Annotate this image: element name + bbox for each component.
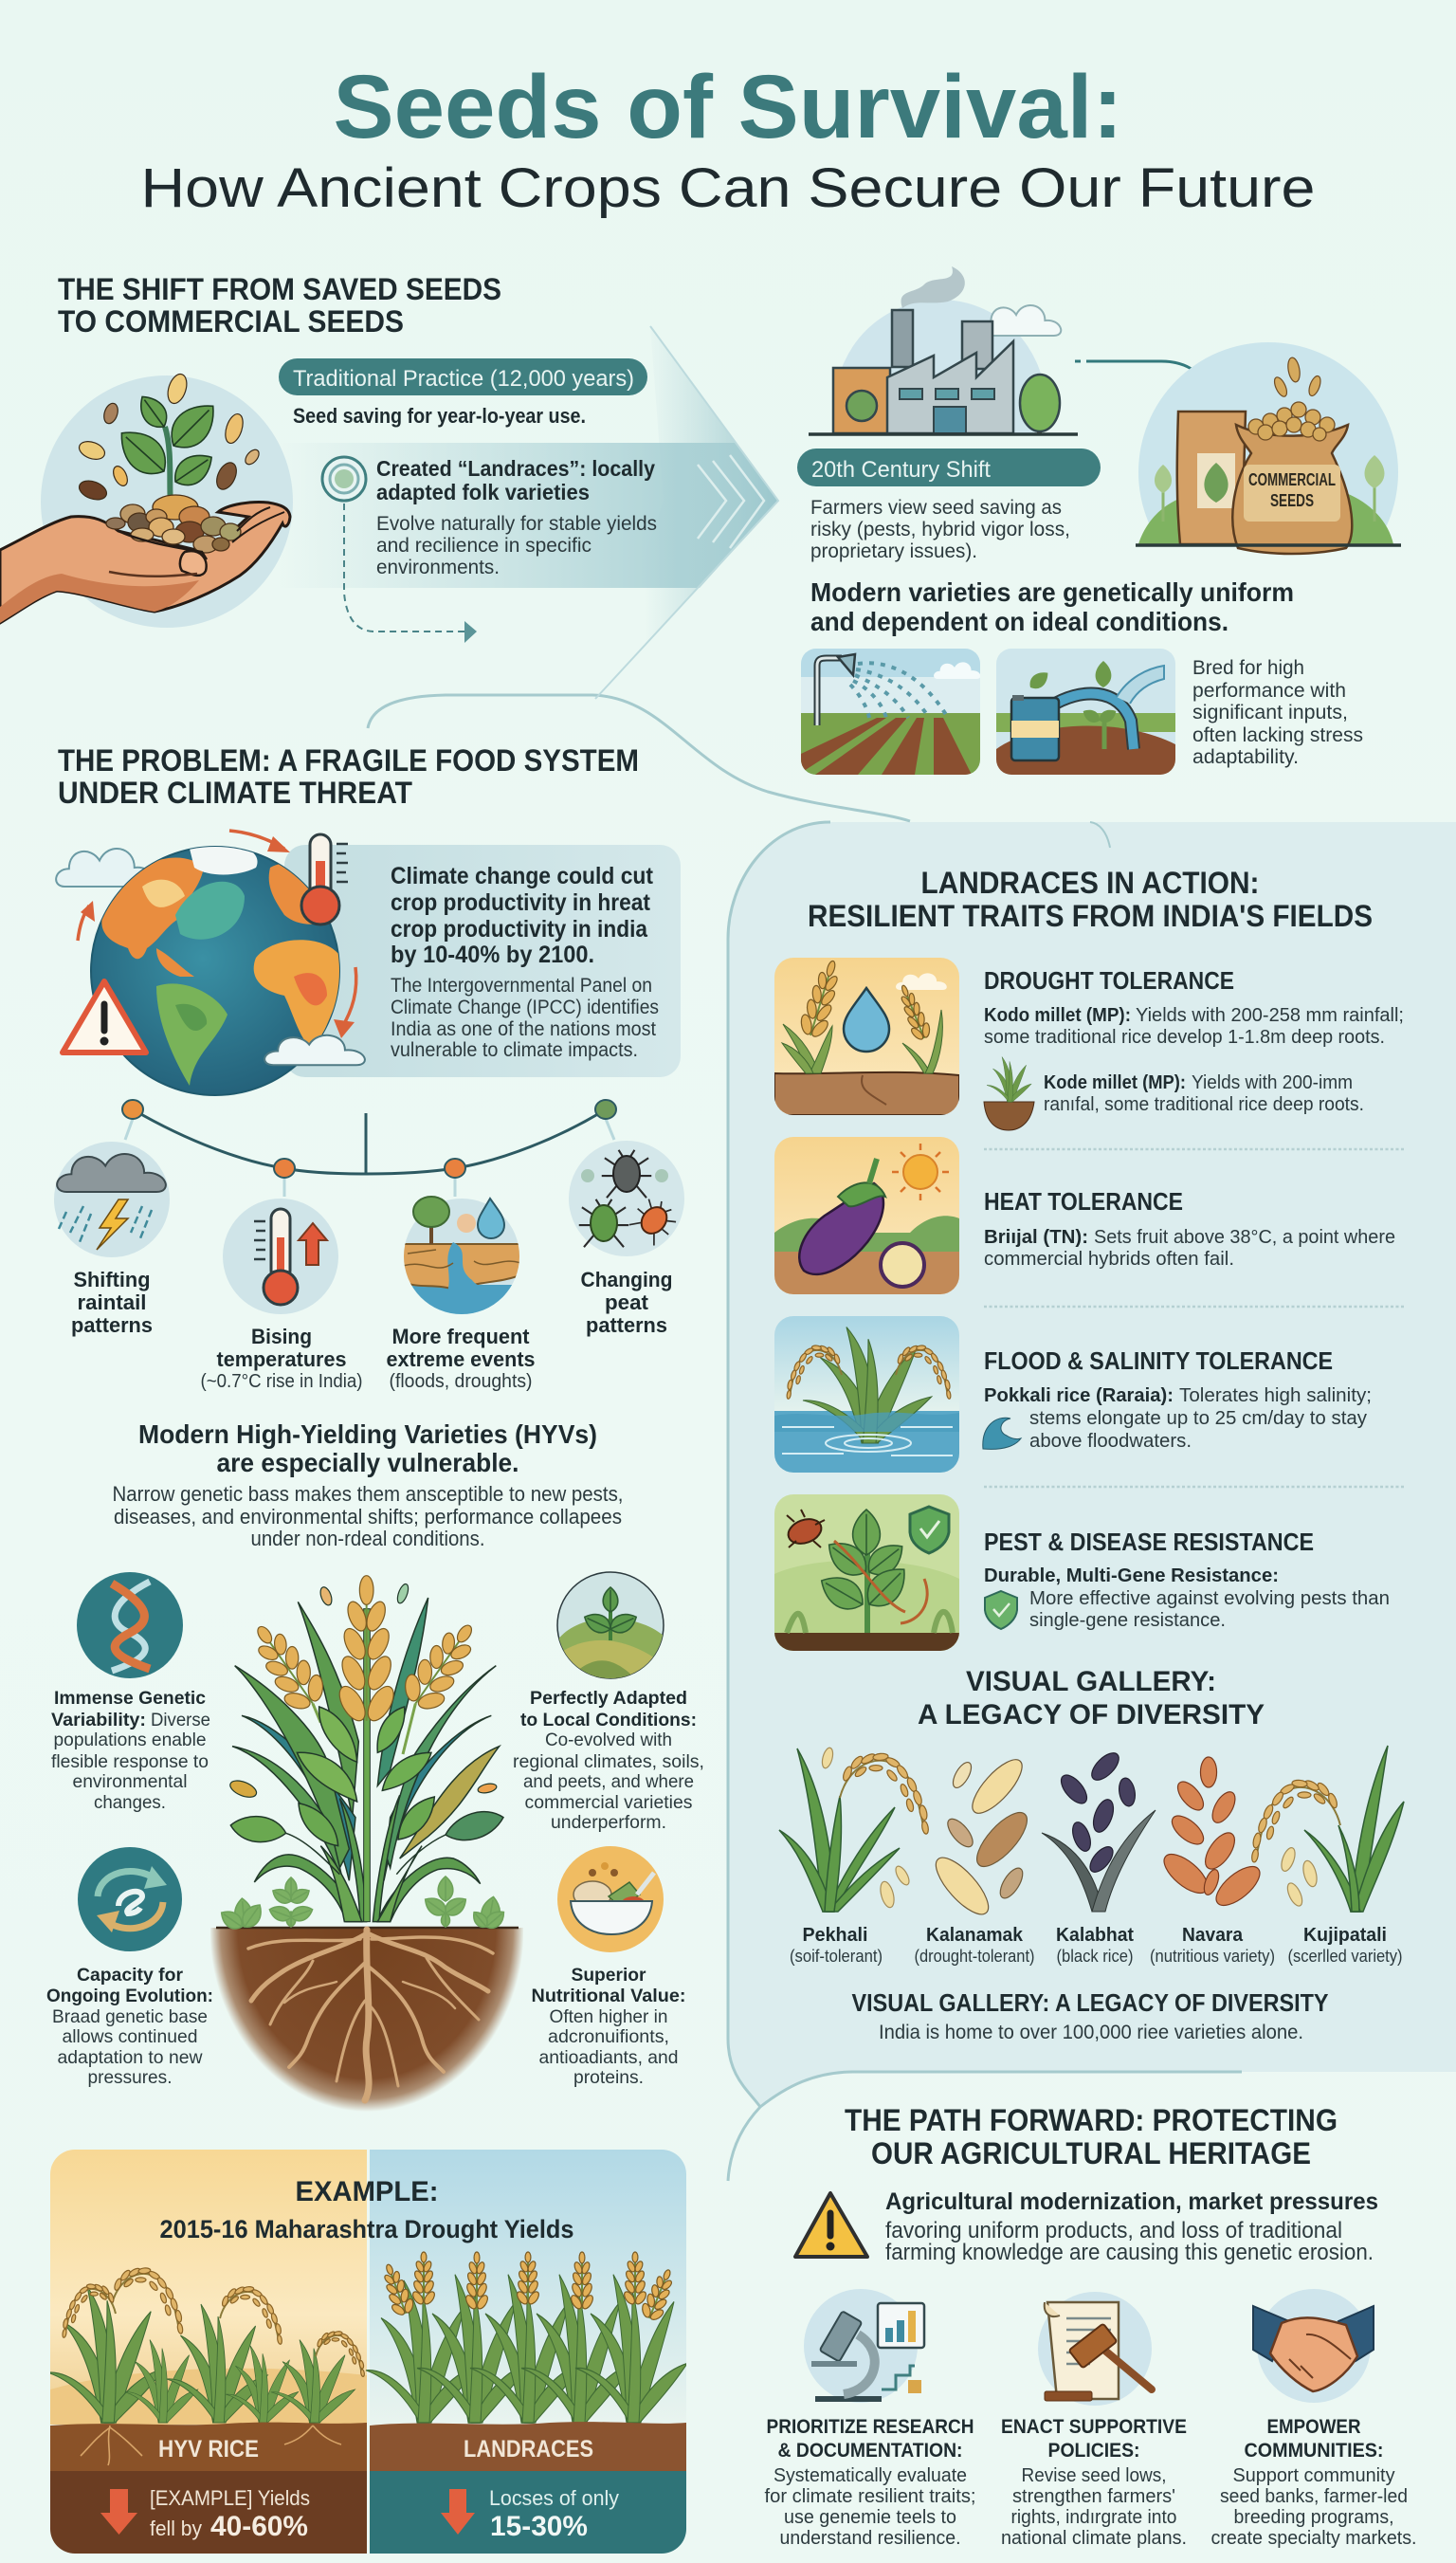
text: HYVs vulnerable: Modern High-Yielding Varieties (HYVs) <box>138 1419 597 1449</box>
text: superior nutrition: proteins. <box>573 2067 644 2088</box>
card: pest illustration <box>774 1494 959 1651</box>
text: modern varieties <box>810 577 1294 636</box>
text: extreme events: More frequent <box>392 1325 530 1348</box>
icon: microscope and chart <box>804 2289 924 2403</box>
text: changing pest patterns: peat <box>605 1291 649 1314</box>
text: empower communities: seed banks, farmer-led <box>1220 2486 1408 2507</box>
text: climate statistic: Climate change could cut <box>391 863 654 889</box>
text: rising temperatures: Bising <box>251 1325 312 1348</box>
text: example heading: 2015-16 Maharashtra Drought Yields <box>159 2215 574 2243</box>
text: landraces description: environments. <box>376 557 500 578</box>
text: bred for high performance: adaptability. <box>1192 746 1299 768</box>
text: bred for high performance: Bred for high <box>1192 657 1304 679</box>
label: HYV rice yields: [EXAMPLE] Yields <box>150 2486 310 2510</box>
text: landraces description <box>376 456 657 578</box>
text: ongoing evolution: adaptation to new <box>57 2047 203 2068</box>
title: How Ancient Crops Can Secure Our Future <box>140 157 1316 219</box>
text: HYVs vulnerable <box>112 1419 624 1550</box>
text: bred for high performance: performance with <box>1192 680 1346 702</box>
text: climate statistic: by 10-40% by 2100. <box>391 942 594 968</box>
icon: globe with thermometer <box>56 831 365 1095</box>
icon: pests <box>569 1141 684 1256</box>
text: drought tolerance: Kode millet (MP): <box>1044 1071 1186 1093</box>
text: gallery labels <box>790 1925 1403 1966</box>
text: flood and salinity: stems elongate up to 25 cm/day to stay <box>1029 1407 1368 1429</box>
label: HYV rice yields: HYV RICE <box>158 2436 259 2462</box>
text: extreme events <box>387 1325 535 1392</box>
text: gallery caption <box>851 1988 1329 2043</box>
label: landraces yields <box>441 2436 619 2542</box>
text: ongoing evolution: Braad genetic base <box>52 2006 208 2027</box>
text: climate statistic <box>391 863 659 1061</box>
heading: the shift <box>58 272 501 339</box>
text: ongoing evolution: Capacity for <box>77 1965 183 1986</box>
heading: the path forward <box>845 2103 1338 2170</box>
text: gallery labels: Kalabhat <box>1056 1925 1134 1946</box>
heading: the shift: TO COMMERCIAL SEEDS <box>58 304 404 339</box>
icon: factory <box>809 266 1078 436</box>
thumbnail: fertilizer <box>996 649 1175 775</box>
text: farmers view: risky (pests, hybrid vigor loss, <box>810 519 1070 540</box>
text: landraces description: Created “Landraces”: locally <box>376 456 655 481</box>
text: prioritize research: Systematically evaluate <box>774 2465 967 2486</box>
text: enact policies: POLICIES: <box>1048 2440 1139 2462</box>
icon: DNA <box>77 1572 183 1678</box>
text: HYVs vulnerable: diseases, and environmental shifts; performance collapees <box>114 1505 622 1529</box>
text: bred for high performance: often lacking stress <box>1192 724 1363 746</box>
text: rising temperatures <box>201 1325 362 1392</box>
text: empower communities: breeding programs, <box>1234 2507 1393 2528</box>
text: heat tolerance: Sets fruit above 38°C, a point where <box>1094 1226 1395 1248</box>
text: locally adapted: regional climates, soils, <box>513 1751 704 1772</box>
text: prioritize research: PRIORITIZE RESEARCH <box>766 2416 974 2438</box>
text: empower communities: create specialty markets. <box>1211 2528 1416 2549</box>
title <box>140 57 1316 219</box>
label: landraces yields: Locses of only <box>489 2486 619 2510</box>
icon: rain cloud <box>54 1142 170 1257</box>
text: genetic variability: Diverse <box>151 1710 210 1730</box>
text: gallery labels: Navara <box>1182 1925 1244 1946</box>
text: example heading <box>159 2176 574 2243</box>
text: superior nutrition <box>531 1965 686 2088</box>
text: locally adapted: commercial varieties <box>525 1792 693 1813</box>
text: empower communities: Support community <box>1232 2465 1395 2486</box>
card: heat illustration <box>774 1137 959 1294</box>
icon: handshake <box>1253 2289 1374 2403</box>
illustration: pokkali <box>779 1747 929 1912</box>
text: enact policies: strengthen farmers' <box>1012 2486 1175 2507</box>
text: flood and salinity: Tolerates high salinity; <box>1179 1384 1372 1406</box>
text: rising temperatures: (~0.7°C rise in India) <box>201 1371 362 1392</box>
text: bred for high performance <box>1192 657 1363 768</box>
text: prioritize research: use genemie teels to <box>784 2507 956 2528</box>
text: example heading: EXAMPLE: <box>296 2176 438 2207</box>
heading: landraces in action: RESILIENT TRAITS FROM INDIA'S FIELDS <box>808 899 1373 933</box>
heading: landraces in action: LANDRACES IN ACTION: <box>921 866 1259 900</box>
icon: rising temperature <box>223 1199 338 1314</box>
text: genetic variability: Variability: <box>51 1710 146 1730</box>
pill: traditional practice <box>279 358 647 395</box>
pill: traditional practice: Traditional Practice (12,000 years) <box>293 366 634 392</box>
text: climate statistic: India as one of the nations most <box>391 1018 656 1040</box>
heading: landraces in action <box>808 866 1373 933</box>
text: modern varieties: and dependent on ideal conditions. <box>810 607 1228 636</box>
text: enact policies: ENACT SUPPORTIVE <box>1001 2416 1187 2438</box>
arrow: factory to bags <box>1075 361 1213 392</box>
text: prioritize research <box>764 2416 976 2549</box>
text: gallery labels: Kujipatali <box>1303 1925 1387 1946</box>
text: genetic variability <box>51 1688 210 1813</box>
text: locally adapted: underperform. <box>551 1812 666 1833</box>
text: genetic variability: Immense Genetic <box>54 1688 206 1709</box>
text: locally adapted: and peets, and where <box>523 1771 694 1792</box>
text: ongoing evolution <box>46 1965 213 2088</box>
text: climate statistic: The Intergovernmental Panel on <box>391 975 652 997</box>
text: shifting rainfall: patterns <box>71 1313 153 1337</box>
illustration: kalabhat black rice <box>1042 1748 1156 1912</box>
heading: the path forward: OUR AGRICULTURAL HERITAGE <box>871 2136 1311 2170</box>
text: locally adapted: Co-evolved with <box>545 1730 672 1750</box>
text: pest and disease: More effective against evolving pests than <box>1029 1587 1390 1609</box>
text: HYVs vulnerable: under non-rdeal conditions. <box>250 1527 485 1550</box>
pill: 20th century shift: 20th Century Shift <box>811 457 991 483</box>
arrow: large shift arrow <box>279 326 778 699</box>
text: gallery labels: (scerlled variety) <box>1287 1947 1403 1966</box>
panel: climate stat <box>284 845 681 1077</box>
label: HYV rice yields <box>100 2436 310 2542</box>
text: drought tolerance <box>984 966 1404 1130</box>
icon: evolution cycle <box>78 1847 182 1951</box>
text: shifting rainfall <box>71 1268 153 1337</box>
illustration: landrace plant with roots <box>210 1576 523 2113</box>
text: drought tolerance: Yields with 200-258 mm rainfall; <box>1136 1004 1404 1026</box>
text: enact policies: rights, indırgrate into <box>1010 2507 1177 2528</box>
text: ongoing evolution: allows continued <box>63 2026 197 2047</box>
card: drought illustration <box>774 957 959 1115</box>
text: ongoing evolution: Ongoing Evolution: <box>46 1986 213 2006</box>
text: genetic erosion warning: Agricultural modernization, market pressures <box>885 2188 1378 2215</box>
text: drought tolerance: some traditional rice develop 1-1.8m deep roots. <box>984 1026 1385 1048</box>
text: gallery labels: (soif-tolerant) <box>790 1947 883 1966</box>
text: prioritize research: for climate resilient traits; <box>764 2486 976 2507</box>
text: heat tolerance <box>984 1187 1395 1270</box>
text: heat tolerance: commercial hybrids often fail. <box>984 1248 1234 1270</box>
text: superior nutrition: Often higher in <box>550 2006 667 2027</box>
text: gallery labels: Pekhali <box>802 1925 868 1946</box>
panel: example drought yields <box>47 2150 687 2554</box>
text: genetic erosion warning: favoring uniform products, and loss of traditional <box>885 2218 1342 2243</box>
heading: visual gallery: A LEGACY OF DIVERSITY <box>918 1699 1265 1730</box>
text: superior nutrition: antioadiants, and <box>538 2047 679 2068</box>
icon: landrace marker with dashed path <box>322 457 477 643</box>
label: landraces yields: 15-30% <box>490 2511 588 2542</box>
illustration: kalanamak grains <box>928 1752 1035 1922</box>
text: prioritize research: & DOCUMENTATION: <box>777 2440 963 2462</box>
text: flood and salinity <box>983 1346 1372 1452</box>
text: enact policies: Revise seed lows, <box>1022 2465 1166 2486</box>
text: genetic variability: populations enable <box>53 1730 207 1750</box>
text: landraces description: and recilience in specific <box>376 535 592 557</box>
text: climate statistic: crop productivity in hreat <box>391 889 651 916</box>
text: drought tolerance: Yields with 200-imm <box>1192 1071 1353 1093</box>
text: superior nutrition: Superior <box>571 1965 646 1986</box>
text: empower communities: EMPOWER <box>1266 2416 1361 2438</box>
text: genetic erosion warning <box>885 2188 1378 2265</box>
text: changing pest patterns: patterns <box>586 1313 667 1337</box>
illustration: navara grains <box>1157 1757 1266 1913</box>
icon: warning triangle <box>795 2193 867 2257</box>
text: flood and salinity: FLOOD & SALINITY TOLERANCE <box>984 1346 1333 1375</box>
text: landraces description: adapted folk varieties <box>376 480 590 504</box>
chart: hanging connector line <box>122 1100 616 1197</box>
text: extreme events: extreme events <box>387 1347 535 1371</box>
text: gallery caption: VISUAL GALLERY: A LEGACY OF DIVERSITY <box>851 1988 1329 2017</box>
text: flood and salinity: Pokkali rice (Raraia): <box>984 1384 1174 1406</box>
text: genetic variability: flesible response to <box>51 1751 209 1772</box>
text: shifting rainfall: raintail <box>78 1291 146 1314</box>
text: HYVs vulnerable: are especially vulnerable. <box>216 1448 519 1477</box>
text: shifting rainfall: Shifting <box>74 1268 150 1291</box>
text: gallery labels: (black rice) <box>1056 1947 1134 1966</box>
text: flood and salinity: above floodwaters. <box>1029 1430 1192 1452</box>
text: farmers view: proprietary issues). <box>810 540 977 562</box>
text: drought tolerance: Kodo millet (MP): <box>984 1004 1131 1026</box>
card: flood illustration <box>774 1316 959 1473</box>
text: gallery labels: Kalanamak <box>926 1925 1024 1946</box>
heading: visual gallery <box>918 1666 1265 1730</box>
text: genetic variability: environmental <box>72 1771 188 1792</box>
text: farmers view <box>810 497 1070 562</box>
icon: scroll and gavel <box>1038 2292 1152 2406</box>
connector: flowing panel outlines <box>368 695 1242 2181</box>
icon: commercial seed bags: SEEDS <box>1270 491 1314 510</box>
text: farmers view: Farmers view seed saving as <box>810 497 1062 519</box>
text: empower communities: COMMUNITIES: <box>1244 2440 1384 2462</box>
text: extreme events: (floods, droughts) <box>389 1371 533 1392</box>
icon: extreme events <box>403 1197 520 1318</box>
thumbnail: irrigation <box>801 649 980 775</box>
text: locally adapted <box>513 1688 704 1833</box>
illustration: kujipatali <box>1251 1746 1404 1912</box>
text: ongoing evolution: pressures. <box>87 2067 173 2088</box>
text: climate statistic: Climate Change (IPCC) identifies <box>391 997 659 1018</box>
label: landraces yields: LANDRACES <box>464 2436 593 2462</box>
text: heat tolerance: Briıjal (TN): <box>984 1226 1088 1248</box>
heading: the problem: UNDER CLIMATE THREAT <box>58 776 412 810</box>
text: gallery labels: (drought-tolerant) <box>914 1947 1035 1966</box>
heading: the path forward: THE PATH FORWARD: PROTECTING <box>845 2103 1338 2137</box>
text: genetic erosion warning: farming knowledge are causing this genetic erosion. <box>885 2240 1374 2265</box>
text: changing pest patterns: Changing <box>580 1268 673 1291</box>
icon: nutrition bowl <box>557 1846 664 1952</box>
text: drought tolerance: DROUGHT TOLERANCE <box>984 966 1234 995</box>
text: modern varieties: Modern varieties are genetically uniform <box>810 577 1294 607</box>
text: pest and disease: single-gene resistance. <box>1029 1609 1226 1631</box>
text: seed saving: Seed saving for year-lo-year use. <box>293 404 586 428</box>
heading: the problem <box>58 743 639 810</box>
icon: hand holding seedling <box>0 372 293 628</box>
text: empower communities <box>1211 2416 1416 2549</box>
text: enact policies: national climate plans. <box>1001 2528 1187 2549</box>
icon: commercial seed bags: COMMERCIAL <box>1248 470 1336 489</box>
text: gallery labels: (nutritious variety) <box>1150 1947 1275 1966</box>
text: prioritize research: understand resilience. <box>779 2528 961 2549</box>
label: HYV rice yields: fell by <box>150 2517 202 2540</box>
text: locally adapted: Perfectly Adapted <box>530 1688 687 1709</box>
text: drought tolerance: ranıfal, some traditional rice deep roots. <box>1044 1093 1364 1115</box>
text: climate statistic: vulnerable to climate impacts. <box>391 1039 638 1061</box>
text: pest and disease: PEST & DISEASE RESISTANCE <box>984 1528 1314 1556</box>
text: HYVs vulnerable: Narrow genetic bass makes them ansceptible to new pests, <box>112 1482 624 1506</box>
text: gallery caption: India is home to over 100,000 riee varieties alone. <box>879 2022 1303 2043</box>
text: locally adapted: to Local Conditions: <box>520 1710 697 1730</box>
title: Seeds of Survival: <box>334 57 1122 157</box>
text: climate statistic: crop productivity in india <box>391 916 648 943</box>
text: changing pest patterns <box>580 1268 673 1337</box>
icon: local fields <box>557 1572 664 1678</box>
text: landraces description: Evolve naturally for stable yields <box>376 513 657 535</box>
label: HYV rice yields: 40-60% <box>210 2511 308 2542</box>
text: pest and disease <box>984 1528 1390 1631</box>
text: pest and disease: Durable, Multi-Gene Resistance: <box>984 1565 1279 1586</box>
text: heat tolerance: HEAT TOLERANCE <box>984 1187 1183 1216</box>
icon: commercial seed bags <box>1136 342 1401 556</box>
text: genetic variability: changes. <box>94 1792 166 1813</box>
pill: 20th century shift <box>797 449 1101 486</box>
heading: the problem: THE PROBLEM: A FRAGILE FOOD SYSTEM <box>58 743 639 778</box>
text: rising temperatures: temperatures <box>216 1347 347 1371</box>
heading: visual gallery: VISUAL GALLERY: <box>966 1666 1216 1697</box>
heading: the shift: THE SHIFT FROM SAVED SEEDS <box>58 272 501 306</box>
text: superior nutrition: Nutritional Value: <box>531 1986 686 2006</box>
text: bred for high performance: significant inputs, <box>1192 702 1348 723</box>
text: superior nutrition: adcronuifionts, <box>548 2026 669 2047</box>
text: enact policies <box>1001 2416 1187 2549</box>
panel: landraces in action background <box>728 822 1456 2107</box>
